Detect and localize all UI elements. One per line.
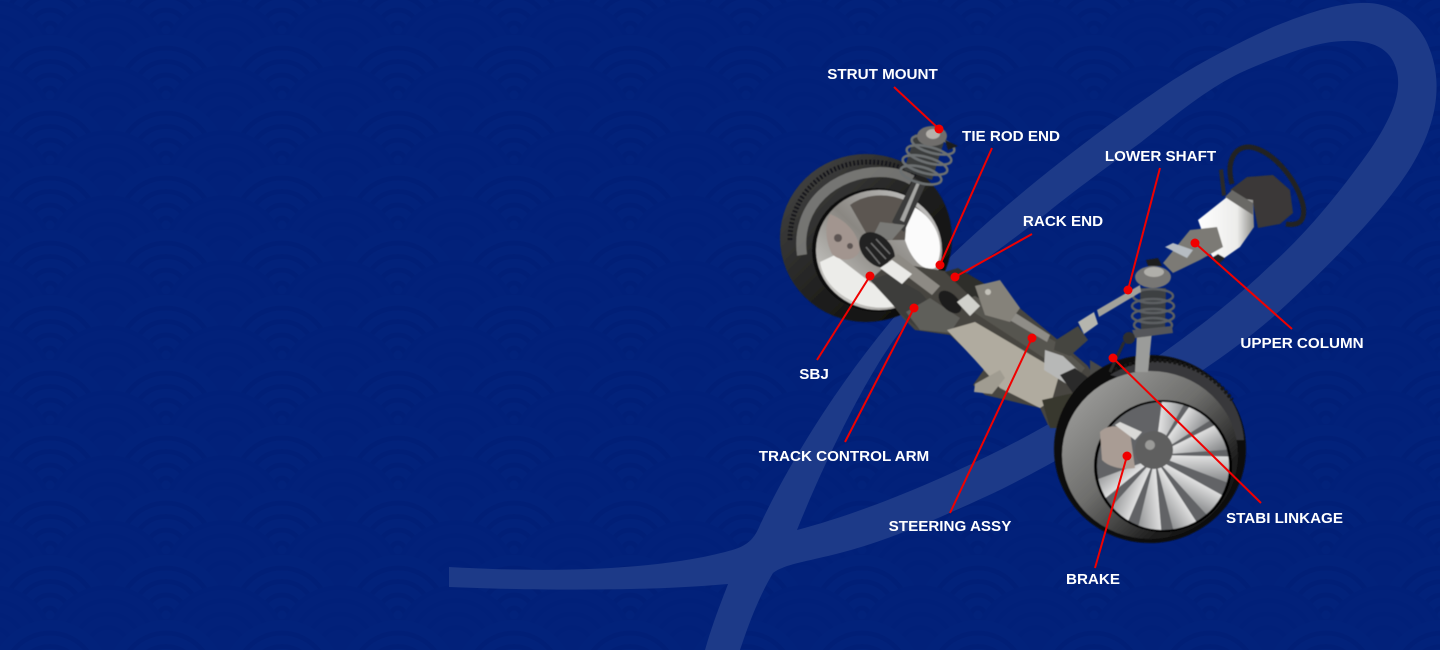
swoosh logo shape [449,3,1437,650]
left front wheel [780,154,952,322]
callout: tie rod end [936,148,992,270]
lower steering shaft [1054,285,1141,356]
left drive shaft boot [852,225,902,275]
label: steering assy: STEERING ASSY [889,518,1011,535]
callout: steering assy [950,334,1036,513]
label: track control arm: TRACK CONTROL ARM [759,448,929,465]
label: lower shaft: LOWER SHAFT [1105,148,1217,165]
callout: lower shaft [1124,168,1160,294]
right wheel [1054,355,1246,547]
callout: track control arm [845,304,918,442]
callout: sbj [817,272,874,360]
callout: stabi linkage [1108,354,1261,503]
car chassis illustration [780,126,1304,547]
callout: rack end [950,234,1032,282]
label: tie rod end: TIE ROD END [962,128,1060,145]
callout: upper column [1190,238,1292,329]
label: strut mount: STRUT MOUNT [827,66,938,83]
subframe and control arm [870,262,1098,430]
label: stabi linkage: STABI LINKAGE [1226,510,1343,527]
upper column and steering wheel [1163,147,1304,273]
alloy spokes [1098,401,1230,531]
hub and brake [1100,426,1135,469]
left strut and spring [872,126,958,240]
label: brake: BRAKE [1066,571,1120,588]
callout: strut mount [894,87,944,134]
label: upper column: UPPER COLUMN [1240,335,1364,352]
label: rack end: RACK END [1023,213,1103,230]
right strut, spring and stabiliser link [1110,258,1174,372]
steering rack [880,254,1113,400]
infographic canvas [449,3,1436,650]
callout lines and dots [817,87,1292,568]
callout: brake [1095,452,1132,568]
brake caliper [826,214,860,260]
label: sbj: SBJ [799,366,829,383]
